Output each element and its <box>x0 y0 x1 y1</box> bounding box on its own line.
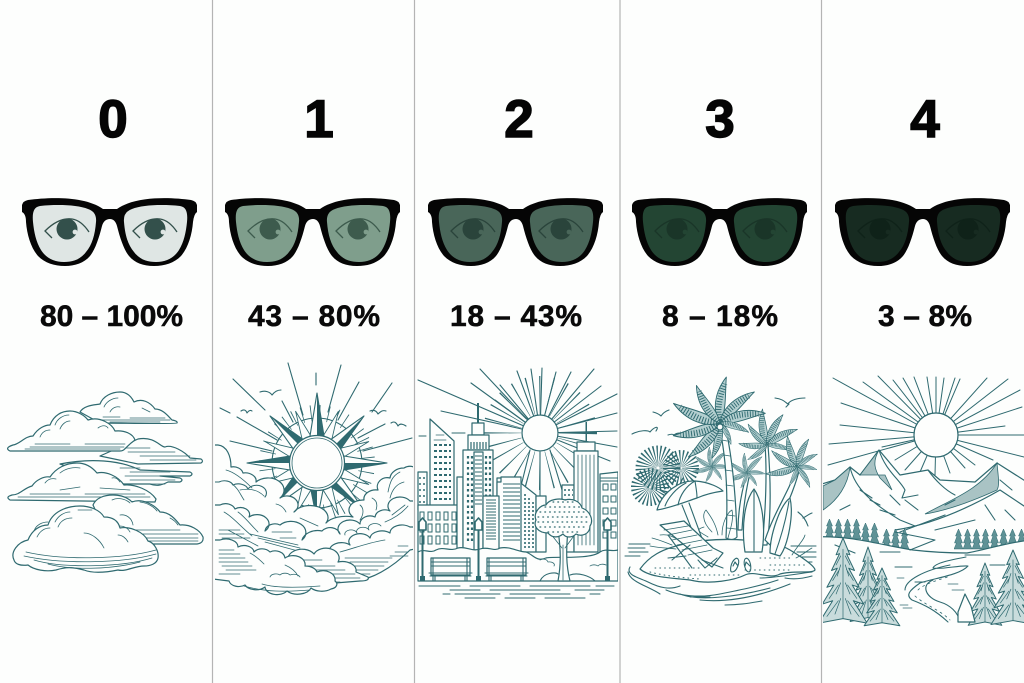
transmission range 2: 18 – 43% <box>450 300 582 333</box>
umbrella <box>657 481 723 544</box>
ground lines <box>418 580 615 582</box>
illustration: beach island <box>625 376 819 605</box>
column 0 <box>8 90 203 572</box>
lamps <box>419 518 426 581</box>
fan palms <box>640 456 690 500</box>
icon: dark tint glasses <box>632 198 807 266</box>
benches <box>429 558 472 581</box>
column dividers <box>212 0 822 683</box>
tree lines <box>825 518 861 540</box>
deck chair <box>660 521 723 568</box>
foreground hedge <box>418 548 618 581</box>
transmission range 0: 80 – 100% <box>40 300 183 333</box>
surfboards <box>743 489 764 552</box>
illustration: sun and clouds <box>215 362 413 596</box>
column 4 <box>823 100 1024 626</box>
river <box>905 557 968 622</box>
icon: light tint glasses <box>225 198 400 266</box>
valley <box>823 536 1024 561</box>
transmission range 1: 43 – 80% <box>248 300 380 333</box>
icon: medium tint glasses <box>428 198 603 266</box>
small plants <box>650 510 812 558</box>
column 1 <box>215 100 413 596</box>
heading: category 1: 1 <box>304 90 334 149</box>
mountain range <box>823 449 1024 484</box>
heading: category 0: 0 <box>98 90 128 149</box>
illustration: mountains <box>823 376 1024 626</box>
sun ray below <box>522 449 562 496</box>
illustration: city <box>418 368 618 598</box>
icon: clear glasses <box>22 198 197 266</box>
transmission range 4: 3 – 8% <box>878 300 972 333</box>
flip-flops <box>731 558 751 572</box>
island <box>640 539 815 582</box>
heading: category 4: 4 <box>910 90 940 149</box>
transmission range 3: 8 – 18% <box>662 300 778 333</box>
tree <box>558 530 570 581</box>
firs <box>850 546 877 622</box>
birds <box>632 398 812 526</box>
column 2 <box>418 90 618 598</box>
column 3 <box>625 90 819 605</box>
icon: birds <box>241 390 406 426</box>
water <box>625 544 816 562</box>
illustration: clouds <box>8 392 203 572</box>
heading: category 2: 2 <box>504 90 534 149</box>
icon: very dark glasses <box>835 198 1010 266</box>
main palm <box>671 376 766 539</box>
back palms <box>692 409 819 545</box>
heading: category 3: 3 <box>705 90 735 149</box>
buildings <box>430 419 454 510</box>
